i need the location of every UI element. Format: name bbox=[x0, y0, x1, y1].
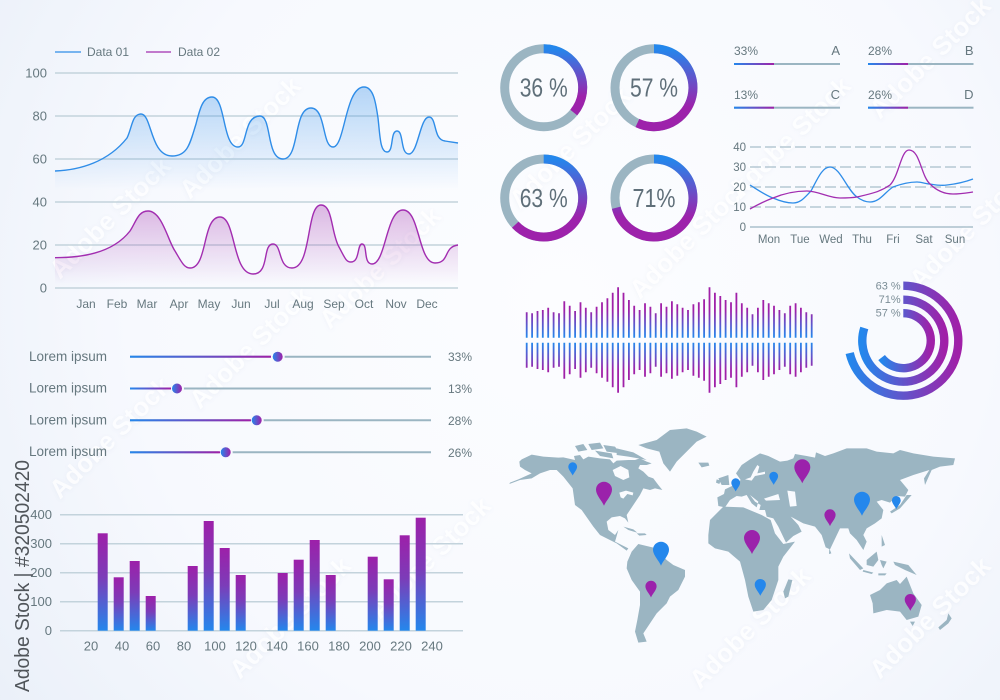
bar chart y labels: 200 bbox=[30, 565, 52, 580]
chart grid bbox=[55, 73, 458, 288]
faint diagonal watermarks: Adobe Stock bbox=[503, 80, 637, 214]
waveform lower bars bbox=[527, 343, 812, 393]
x axis labels: Feb bbox=[107, 297, 128, 311]
x axis labels: Oct bbox=[355, 297, 374, 311]
legend: Data 01 bbox=[55, 45, 129, 59]
bar chart y labels bbox=[30, 507, 52, 638]
world map bbox=[509, 428, 955, 643]
bar chart x labels: 20 bbox=[84, 639, 98, 654]
map: Eurasia, Africa, Oceania bbox=[708, 448, 955, 630]
bar chart x labels: 200 bbox=[359, 639, 381, 654]
faint diagonal watermarks: Adobe Stock bbox=[683, 560, 817, 694]
y axis labels: 40 bbox=[33, 194, 47, 210]
pin: Russia bbox=[794, 459, 810, 483]
radial inner ring 57%: 57 % bbox=[876, 308, 901, 320]
x axis labels: Dec bbox=[416, 297, 438, 311]
weekly x labels: Fri bbox=[886, 234, 900, 246]
pin: Southern Africa bbox=[755, 579, 766, 596]
progress B: 28% bbox=[868, 44, 892, 58]
x axis labels: Nov bbox=[385, 297, 407, 311]
bar chart grid bbox=[60, 515, 463, 631]
pin: Korea bbox=[892, 496, 901, 509]
faint diagonal watermarks: Adobe Stock bbox=[313, 200, 447, 334]
donut 36% bbox=[505, 49, 583, 127]
legend: Data 02 bbox=[146, 45, 220, 59]
series fill: Data 02 bbox=[55, 205, 458, 285]
pin: Central Africa bbox=[744, 530, 760, 554]
y axis labels: 60 bbox=[33, 152, 47, 166]
slider 3: 28% bbox=[448, 414, 472, 428]
slider 3: Lorem ipsum bbox=[29, 412, 107, 427]
slider 2: Lorem ipsum bbox=[29, 381, 107, 396]
y axis labels: 100 bbox=[25, 66, 47, 80]
faint diagonal watermarks: Adobe Stock bbox=[723, 70, 857, 204]
bar chart x labels: 240 bbox=[421, 639, 443, 654]
sliders bbox=[29, 349, 472, 460]
faint diagonal watermarks: Adobe Stock bbox=[863, 550, 997, 684]
radial middle ring 71%: 71% bbox=[879, 294, 901, 306]
progress D: D bbox=[964, 87, 974, 102]
bar chart y labels: 100 bbox=[30, 594, 52, 609]
bar chart x labels bbox=[84, 639, 443, 654]
slider 3 bbox=[29, 412, 472, 428]
bar chart x labels: 100 bbox=[204, 639, 226, 654]
slider 1 bbox=[29, 349, 472, 364]
y axis labels: 20 bbox=[33, 238, 47, 252]
progress D bbox=[868, 87, 974, 109]
pin: Australia bbox=[905, 594, 916, 611]
x axis labels: Sep bbox=[323, 297, 345, 311]
pin: South America bbox=[645, 581, 657, 598]
y axis labels: 0 bbox=[40, 280, 47, 296]
faint diagonal watermarks: Adobe Stock bbox=[183, 280, 317, 414]
series line: Data 02 bbox=[55, 205, 458, 274]
bar chart x labels: 60 bbox=[146, 639, 160, 654]
donut gauges bbox=[505, 49, 693, 237]
donut 36%: 36 % bbox=[520, 75, 568, 103]
bar chart x labels: 120 bbox=[235, 639, 257, 654]
progress B: B bbox=[965, 43, 974, 58]
x axis labels bbox=[76, 297, 438, 311]
weekly baseline bbox=[750, 226, 973, 228]
map pins bbox=[568, 459, 916, 611]
progress C: 13% bbox=[734, 88, 758, 102]
bar chart y labels: 0 bbox=[45, 623, 52, 638]
faint diagonal watermarks: Adobe Stock bbox=[623, 170, 757, 304]
pin: India bbox=[824, 509, 836, 526]
weekly x labels: Sun bbox=[945, 234, 965, 246]
x axis labels: May bbox=[198, 297, 220, 311]
donut 63% bbox=[505, 159, 583, 237]
x axis labels: Jul bbox=[264, 297, 280, 311]
progress A: 33% bbox=[734, 44, 758, 58]
faint diagonal watermarks: Adobe Stock bbox=[363, 490, 497, 624]
slider 2: 13% bbox=[448, 382, 472, 396]
weekly y labels bbox=[733, 142, 746, 234]
donut 71% bbox=[615, 159, 693, 237]
weekly series blue bbox=[750, 167, 973, 203]
area line chart bbox=[25, 66, 458, 311]
bar chart x labels: 220 bbox=[390, 639, 412, 654]
faint diagonal watermarks: Adobe Stock bbox=[223, 550, 357, 684]
y axis labels bbox=[25, 66, 47, 296]
bar chart y labels: 400 bbox=[30, 507, 52, 522]
x axis labels: Mar bbox=[137, 297, 157, 311]
weekly grid bbox=[750, 147, 973, 207]
legend: Data 01: Data 01 bbox=[87, 45, 129, 59]
pin: China bbox=[854, 492, 870, 516]
map: Americas bbox=[509, 428, 709, 643]
pin: Brazil bbox=[653, 542, 669, 566]
stock id vertical text: Adobe Stock | #320502420 bbox=[12, 460, 34, 692]
weekly line chart bbox=[733, 142, 973, 246]
progress C bbox=[734, 87, 840, 109]
bar chart bbox=[30, 507, 463, 654]
bars bbox=[98, 518, 426, 631]
weekly y labels: 30 bbox=[733, 162, 746, 174]
bar chart x labels: 140 bbox=[266, 639, 288, 654]
progress D: 26% bbox=[868, 88, 892, 102]
donut 63%: 63 % bbox=[520, 185, 568, 213]
weekly y labels: 0 bbox=[740, 222, 746, 234]
bar chart x labels: 160 bbox=[297, 639, 319, 654]
slider 4: Lorem ipsum bbox=[29, 444, 107, 459]
progress C: C bbox=[831, 87, 840, 102]
donut 57% bbox=[615, 49, 693, 127]
pin: North America bbox=[596, 482, 612, 506]
x axis labels: Aug bbox=[292, 297, 314, 311]
x axis labels: Apr bbox=[170, 297, 188, 311]
donut 71%: 71% bbox=[632, 185, 676, 213]
bar chart y labels: 300 bbox=[30, 536, 52, 551]
progress A: A bbox=[831, 43, 840, 58]
slider 1: 33% bbox=[448, 350, 472, 364]
weekly x labels: Tue bbox=[790, 234, 810, 246]
weekly y labels: 40 bbox=[733, 142, 746, 154]
weekly x labels: Mon bbox=[758, 234, 780, 246]
x axis labels: Jan bbox=[76, 297, 96, 311]
weekly x labels: Thu bbox=[852, 234, 872, 246]
slider 4: 26% bbox=[448, 446, 472, 460]
slider 4 bbox=[29, 444, 472, 460]
x axis labels: Jun bbox=[231, 297, 251, 311]
bar chart x labels: 180 bbox=[328, 639, 350, 654]
legend: Data 02: Data 02 bbox=[178, 45, 220, 59]
bar chart x labels: 40 bbox=[115, 639, 129, 654]
pin: Western Europe bbox=[731, 478, 740, 492]
legend bbox=[55, 45, 220, 59]
progress bars bbox=[734, 43, 974, 109]
donut 57%: 57 % bbox=[630, 75, 678, 103]
radial bar chart bbox=[850, 280, 958, 396]
faint diagonal watermarks: Adobe Stock bbox=[43, 370, 177, 504]
progress A bbox=[734, 43, 840, 65]
pin: Alaska area bbox=[568, 462, 577, 476]
radial outer ring 63%: 63 % bbox=[876, 280, 901, 292]
progress B bbox=[868, 43, 974, 65]
series line: Data 01 bbox=[55, 87, 458, 171]
y axis labels: 80 bbox=[33, 108, 47, 124]
weekly x labels: Sat bbox=[915, 234, 933, 246]
weekly y labels: 20 bbox=[733, 182, 746, 194]
weekly x labels bbox=[758, 234, 965, 246]
audio waveform bbox=[527, 287, 812, 393]
pin: Eastern Europe bbox=[769, 472, 778, 485]
series fill: Data 01 bbox=[55, 87, 458, 190]
slider 2 bbox=[29, 381, 472, 396]
weekly x labels: Wed bbox=[819, 234, 843, 246]
faint diagonal watermarks: Adobe Stock bbox=[173, 70, 307, 204]
slider 1: Lorem ipsum bbox=[29, 349, 107, 364]
weekly y labels: 10 bbox=[733, 202, 746, 214]
weekly series purple bbox=[750, 150, 973, 209]
faint diagonal watermarks: Adobe Stock bbox=[43, 150, 177, 284]
bar chart x labels: 80 bbox=[177, 639, 191, 654]
waveform upper bars bbox=[527, 287, 812, 338]
